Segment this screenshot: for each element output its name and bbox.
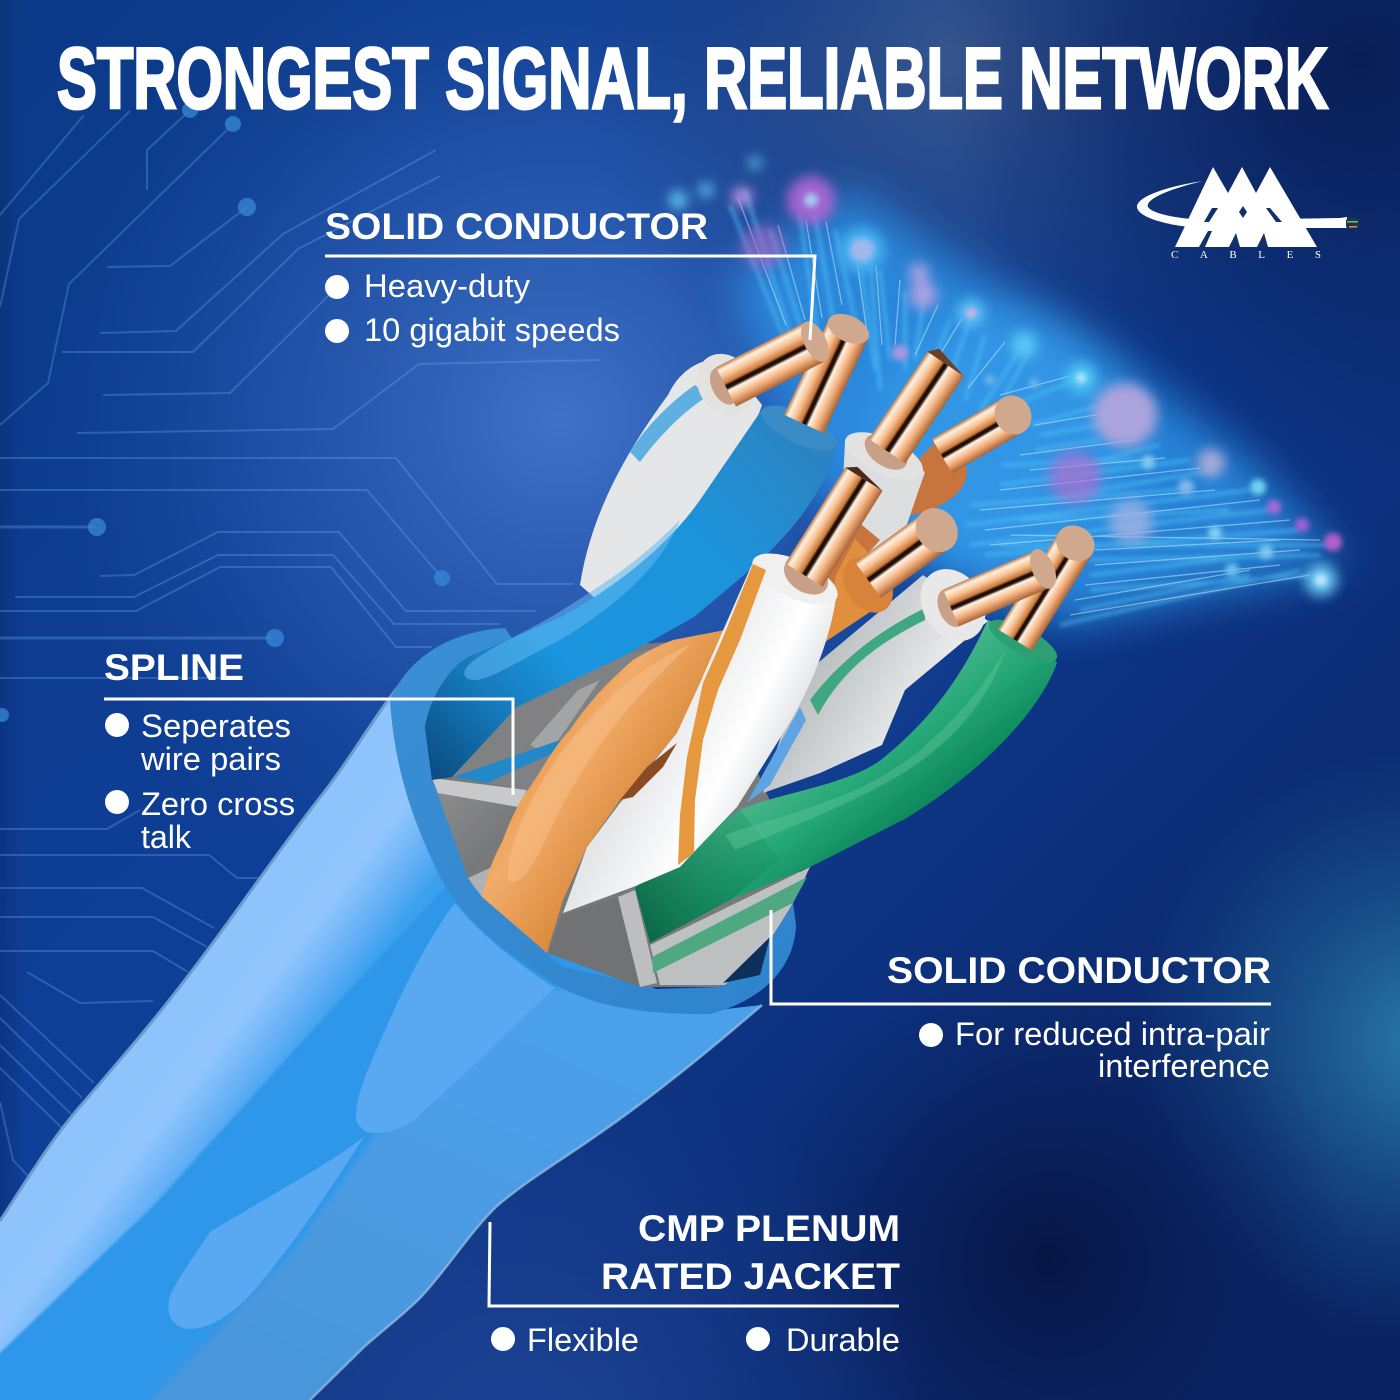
callout: spline: talk: [141, 819, 192, 855]
fibre optic glow haze: [730, 190, 1345, 625]
callout: solid conductor top: Heavy-duty: [364, 268, 530, 304]
callout: CMP plenum rated jacket: RATED JACKET: [601, 1255, 900, 1297]
logo: AAA Cables: [1137, 167, 1359, 261]
circuit nodes: [0, 102, 450, 722]
callout: solid conductor top: [325, 205, 815, 348]
callout: spline: wire pairs: [140, 741, 281, 777]
copper tip: brown conductor: [932, 389, 1039, 473]
fibre optic light points: [669, 157, 1342, 596]
cable opening rim: [390, 628, 796, 1014]
wire: solid green: [635, 612, 1063, 943]
callout: CMP plenum rated jacket: CMP PLENUM: [638, 1207, 900, 1249]
wire: solid orange: [482, 539, 903, 953]
copper tip: blue conductor: [784, 308, 874, 433]
callout: spline: Seperates: [141, 708, 291, 744]
callout: solid conductor right: interference: [1098, 1048, 1270, 1084]
callout: solid conductor top: SOLID CONDUCTOR: [325, 205, 708, 247]
logo: AAA Cables: CABLES: [1171, 249, 1321, 261]
callout: solid conductor top: 10 gigabit speeds: [364, 312, 620, 348]
wire: gray and brown back pair: [700, 422, 967, 690]
cable interior and spline: [425, 640, 810, 987]
callout: spline: Zero cross: [141, 786, 295, 822]
callout: solid conductor right: SOLID CONDUCTOR: [887, 949, 1271, 991]
copper tip: green conductor: [998, 518, 1101, 651]
circuit board lines: [0, 111, 600, 1177]
copper tip: gray conductor: [869, 344, 969, 463]
fibre optic strands fan: [730, 190, 1330, 625]
callout: CMP plenum rated jacket: Durable: [786, 1322, 900, 1358]
copper tip: white-blue conductor: [716, 317, 835, 407]
callout: solid conductor right: [771, 910, 1271, 1084]
callout: CMP plenum rated jacket: Flexible: [527, 1322, 639, 1358]
wire: white with blue stripe: [580, 342, 767, 620]
copper tip: white-orange conductor: [785, 462, 886, 587]
wire: white with orange stripe: [563, 543, 845, 913]
copper tip: orange conductor: [854, 500, 966, 599]
callout: spline: SPLINE: [104, 646, 244, 688]
cable jacket: [0, 670, 780, 1400]
callout: spline: [104, 646, 513, 855]
wire: solid blue: [425, 397, 842, 780]
callout: CMP plenum rated jacket: [489, 1207, 900, 1358]
wire: gray with green stripe: [747, 557, 999, 803]
callout: solid conductor right: For reduced intra-pair: [955, 1016, 1270, 1052]
copper tip: white-green conductor: [943, 545, 1061, 627]
